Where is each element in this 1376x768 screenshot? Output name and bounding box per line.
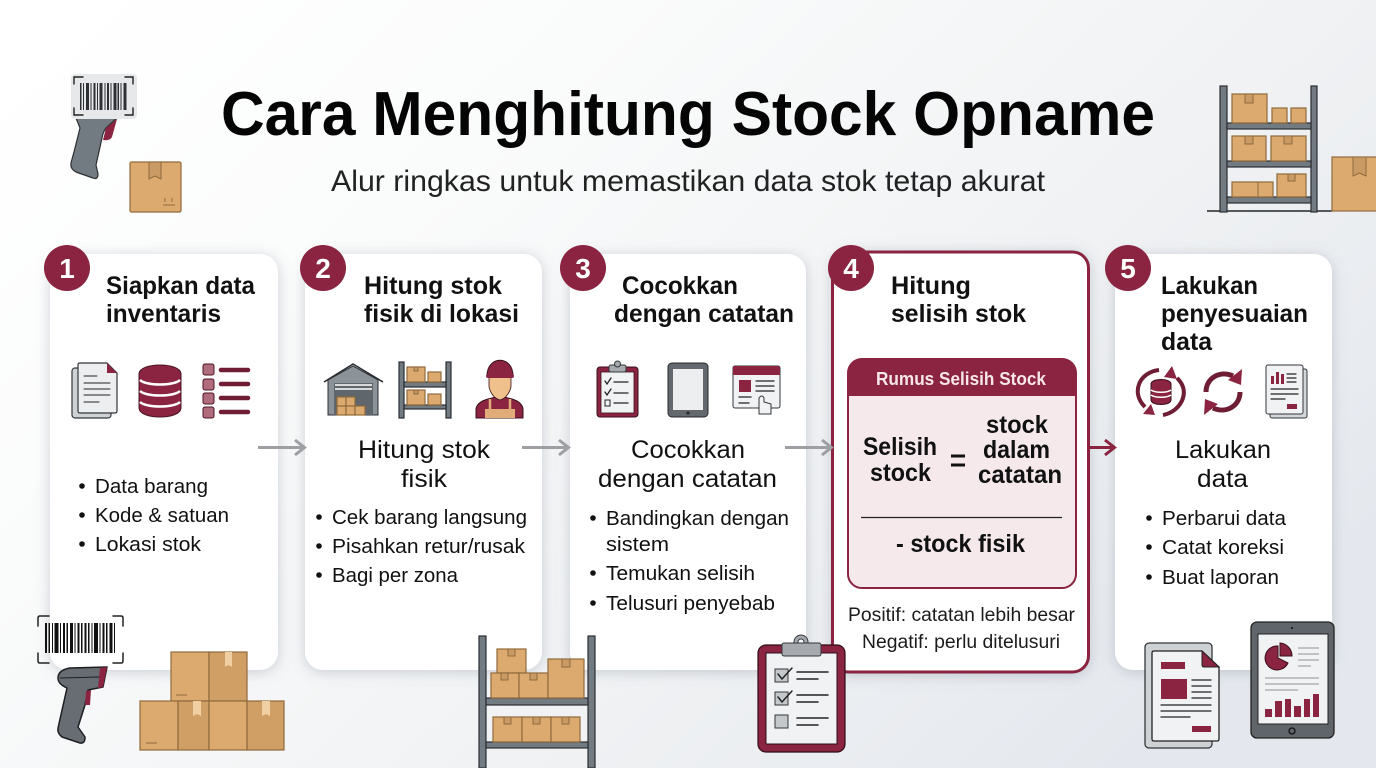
formula notes xyxy=(848,605,1076,653)
subtitle: Alur ringkas untuk memastikan data stok tetap akurat xyxy=(331,165,1046,198)
arrow 1 to 2 xyxy=(258,440,304,455)
subheading step 5: data xyxy=(1197,465,1248,493)
icon: shelf with boxes bottom centre xyxy=(479,636,595,768)
heading step 5: data xyxy=(1161,328,1213,356)
heading step 2 xyxy=(364,272,519,328)
icon: tablet with charts xyxy=(1251,622,1334,738)
bullets step 2: Pisahkan retur/rusak xyxy=(332,536,526,558)
icon: clipboard checklist xyxy=(758,635,845,752)
badge 2: 2 xyxy=(315,253,331,284)
bullets step 3: Temukan selisih xyxy=(606,563,755,585)
equals sign xyxy=(951,456,965,465)
bullets step 3: Telusuri penyebab xyxy=(606,593,775,615)
heading step 1: inventaris xyxy=(106,300,221,328)
bullets step 3: sistem xyxy=(606,534,669,556)
icon: sync arrows xyxy=(1204,369,1242,415)
icon: database sync xyxy=(1138,366,1184,415)
heading step 4: selisih stok xyxy=(891,300,1026,328)
bullets step 5: Perbarui data xyxy=(1162,508,1287,530)
badge 1: 1 xyxy=(59,253,75,284)
subheading step 2 xyxy=(358,436,491,493)
bullets step 1 xyxy=(79,476,229,556)
formula left xyxy=(863,433,937,487)
heading step 5: penyesuaian xyxy=(1161,300,1308,328)
formula right: stock xyxy=(986,411,1048,439)
icon: shelf xyxy=(399,362,451,418)
heading step 2: fisik di lokasi xyxy=(364,300,519,328)
formula right: catatan xyxy=(978,461,1062,489)
icon: tablet xyxy=(668,363,708,417)
badge 3: 3 xyxy=(575,253,591,284)
panel: step 5 xyxy=(1105,245,1332,670)
heading step 5 xyxy=(1161,272,1308,356)
subheading step 3: Cocokkan xyxy=(631,436,745,464)
subheading step 2: fisik xyxy=(401,465,448,493)
formula title: Rumus Selisih Stock xyxy=(876,369,1047,389)
formula subtraction: - stock fisik xyxy=(896,530,1025,558)
bullets step 1: Kode & satuan xyxy=(95,505,229,527)
badge 3 xyxy=(560,245,606,291)
bullets step 3 xyxy=(590,508,789,615)
bullets step 1: Lokasi stok xyxy=(95,534,202,556)
heading step 3 xyxy=(614,272,794,328)
formula right xyxy=(978,411,1062,489)
icon: worker xyxy=(476,360,523,418)
badge 2 xyxy=(300,245,346,291)
heading step 2: Hitung stok xyxy=(364,272,502,300)
panel: step 1 xyxy=(44,245,278,670)
formula notes: Negatif: perlu ditelusuri xyxy=(862,632,1060,653)
icon: report document xyxy=(1266,365,1307,418)
icon: report document bottom right xyxy=(1145,643,1219,748)
icon: large box top right xyxy=(1332,157,1376,211)
badge 4 xyxy=(828,245,874,291)
formula left: stock xyxy=(870,459,931,487)
panel: step 2 xyxy=(300,245,542,670)
bullets step 5: Buat laporan xyxy=(1162,567,1279,589)
icon: barcode scanner bottom left xyxy=(38,616,123,743)
icon: documents xyxy=(72,363,117,418)
icon: barcode scanner top left xyxy=(71,74,137,178)
badge 1 xyxy=(44,245,90,291)
bullets step 5 xyxy=(1146,508,1287,589)
heading step 1 xyxy=(106,272,256,328)
heading step 1: Siapkan data xyxy=(106,272,256,300)
bullets step 5: Catat koreksi xyxy=(1162,537,1284,559)
formula box xyxy=(848,359,1076,588)
icon: warehouse xyxy=(324,364,383,415)
badge 5: 5 xyxy=(1120,253,1136,284)
formula notes: Positif: catatan lebih besar xyxy=(848,605,1076,626)
heading step 3: dengan catatan xyxy=(614,300,794,328)
formula right: dalam xyxy=(983,436,1050,464)
formula left: Selisih xyxy=(863,433,937,461)
icon: list xyxy=(203,364,248,418)
panel: step 3 xyxy=(560,245,806,670)
arrow 3 to 4 xyxy=(785,440,832,455)
icon: stacked boxes xyxy=(140,652,284,750)
subheading step 5: Lakukan xyxy=(1175,436,1271,464)
icon: browser with hand xyxy=(733,366,780,414)
heading step 5: Lakukan xyxy=(1161,272,1258,300)
bullets step 1: Data barang xyxy=(95,476,208,498)
bullets step 2: Cek barang langsung xyxy=(332,507,527,529)
badge 4: 4 xyxy=(843,253,859,284)
panel: step 4 xyxy=(828,245,1088,672)
heading step 3: Cocokkan xyxy=(622,272,738,300)
arrow 2 to 3 xyxy=(522,440,568,455)
bullets step 2: Bagi per zona xyxy=(332,565,459,587)
icon: database xyxy=(139,365,181,417)
bullets step 2 xyxy=(316,507,527,587)
arrow 4 to 5 xyxy=(1090,440,1114,455)
icon: cardboard box top left xyxy=(130,162,181,212)
subheading step 3 xyxy=(598,436,777,493)
title: Cara Menghitung Stock Opname xyxy=(221,80,1155,149)
subheading step 3: dengan catatan xyxy=(598,465,777,493)
badge 5 xyxy=(1105,245,1151,291)
icon: warehouse shelf top right xyxy=(1207,86,1332,212)
subheading step 2: Hitung stok xyxy=(358,436,491,464)
heading step 4 xyxy=(891,272,1026,328)
bullets step 3: Bandingkan dengan xyxy=(606,508,789,530)
icon: clipboard small xyxy=(597,361,638,417)
heading step 4: Hitung xyxy=(891,272,971,300)
subheading step 5 xyxy=(1175,436,1271,493)
